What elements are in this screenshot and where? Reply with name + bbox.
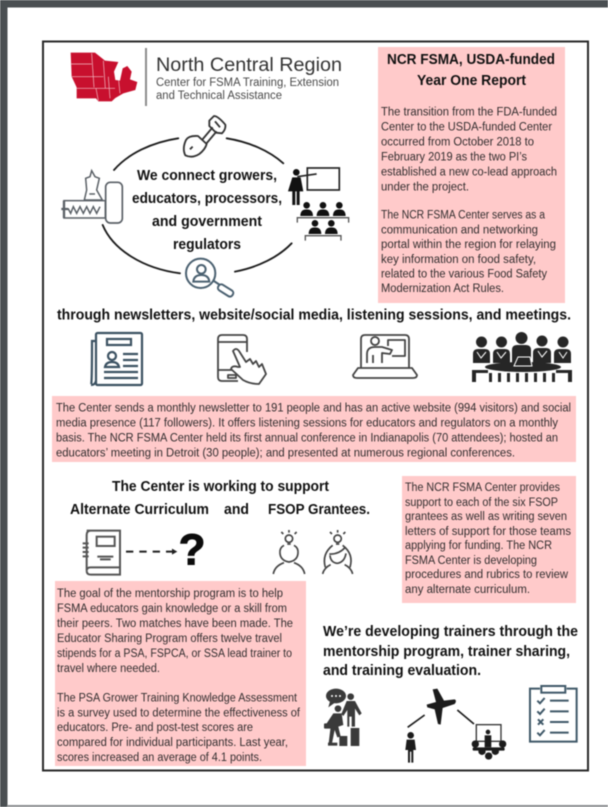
text: mentorship paragraph: travel where needed. <box>57 663 160 675</box>
icon: teacher and class <box>288 168 349 241</box>
panel: outreach summary: basis. The NCR FSMA Center held its first annual conference in Indianapolis (70 attendees); hosted an <box>56 432 558 444</box>
text: communication paragraph <box>381 210 556 295</box>
panel: report intro <box>378 47 565 303</box>
icon: trainer travel by plane <box>405 689 506 763</box>
panel: FSOP grantee support: procedures and rubrics to review <box>405 569 569 581</box>
text: communication paragraph: portal within the region for relaying <box>381 239 556 251</box>
panel: FSOP grantee support: letters of support for those teams <box>405 526 571 538</box>
text: mentorship paragraph: Educator Sharing Program offers twelve travel <box>57 633 282 645</box>
heading: the center is working to support: Alternate Curriculum <box>70 502 209 518</box>
text: assessment paragraph: educators. Pre- and post-test scores are <box>57 722 253 734</box>
icon: shovel <box>184 116 225 157</box>
heading: developing trainers <box>323 624 578 679</box>
panel: outreach summary: The Center sends a monthly newsletter to 191 people and has an active website (994 visitors) and social <box>56 402 571 414</box>
icon: newspaper <box>91 333 142 385</box>
text: transition paragraph: February 2019 as the two PI’s <box>381 152 527 164</box>
panel: FSOP grantee support: FSMA Center is developing <box>405 555 537 567</box>
text: communication paragraph: related to the various Food Safety <box>381 268 547 280</box>
panel: mentorship program <box>55 581 306 766</box>
panel: FSOP grantee support: grantees as well as writing seven <box>405 511 567 523</box>
heading: who we connect: We connect growers, <box>137 168 277 184</box>
logo: North Central Region: and Technical Assistance <box>156 90 282 102</box>
text: assessment paragraph: compared for individual participants. Last year, <box>57 737 288 749</box>
heading: the center is working to support <box>70 479 370 518</box>
icon: region map <box>71 53 137 101</box>
heading: through newsletters: through newsletters, website/social media, listening sessions, and meetings. <box>57 308 571 324</box>
ring arcs <box>103 138 292 273</box>
text: mentorship paragraph: FSMA educators gain knowledge or a skill from <box>57 603 287 615</box>
icon: meeting around a table <box>472 332 572 382</box>
text: mentorship paragraph: stipends for a PSA, FSPCA, or SSA lead trainer to <box>57 648 292 660</box>
text: communication paragraph: Modernization Act Rules. <box>381 283 504 295</box>
text: communication paragraph: communication and networking <box>381 224 538 236</box>
text: transition paragraph: established a new co-lead approach <box>381 166 557 178</box>
text: assessment paragraph <box>57 692 301 764</box>
text: mentorship paragraph: their peers. Two matches have been made. The <box>57 618 293 630</box>
heading: the center is working to support: The Center is working to support <box>112 479 329 495</box>
text: mentorship paragraph: The goal of the mentorship program is to help <box>57 588 283 600</box>
icon: laptop with presenter <box>353 335 417 378</box>
heading: developing trainers: We’re developing trainers through the <box>323 624 578 640</box>
panel: FSOP grantee support: support to each of the six FSOP <box>405 497 558 509</box>
logo: North Central Region: Center for FSMA Training, Extension <box>156 77 339 89</box>
logo: North Central Region <box>71 48 342 106</box>
text: transition paragraph: Center to the USDA-funded Center <box>381 122 552 134</box>
panel: FSOP grantee support: any alternate curriculum. <box>405 584 530 596</box>
airplane <box>427 689 456 725</box>
heading: report title <box>387 52 555 89</box>
heading: developing trainers: mentorship program, trainer sharing, <box>323 644 570 660</box>
heading: who we connect: and government <box>152 214 262 230</box>
text: assessment paragraph: is a survey used to determine the effectiveness of <box>57 708 301 720</box>
panel: FSOP grantee support <box>402 476 576 603</box>
diagram: stakeholder ring <box>61 116 349 298</box>
icon: mentor and mentee on steps <box>324 689 362 746</box>
panel: FSOP grantee support: applying for funding. The NCR <box>405 540 552 552</box>
icon: evaluation checklist <box>530 686 577 742</box>
text: communication paragraph: The NCR FSMA Center serves as a <box>381 210 546 222</box>
panel: outreach summary: educators’ meeting in Detroit (30 people); and presented at numerous regional conferences. <box>56 448 515 460</box>
icon: curriculum book to question mark <box>83 526 206 575</box>
heading: who we connect: regulators <box>173 237 241 253</box>
text: transition paragraph: occurred from October 2018 to <box>381 136 534 148</box>
panel: FSOP grantee support: The NCR FSMA Center provides <box>405 482 560 494</box>
icon: processing machine <box>61 171 122 223</box>
heading: report title: Year One Report <box>417 73 526 89</box>
icon: phone with tapping hand <box>218 335 266 384</box>
heading: who we connect <box>132 168 282 253</box>
text: transition paragraph: under the project. <box>381 182 469 194</box>
heading: developing trainers: and training evaluation. <box>323 663 481 679</box>
heading: report title: NCR FSMA, USDA-funded <box>387 52 555 68</box>
icon: magnifier with person <box>186 259 234 298</box>
text: mentorship paragraph <box>57 588 293 675</box>
icon: curriculum book to question mark: ? <box>179 526 206 575</box>
text: transition paragraph <box>381 106 557 194</box>
text: assessment paragraph: The PSA Grower Training Knowledge Assessment <box>57 692 298 704</box>
panel: outreach summary <box>52 396 576 462</box>
icon: grantees with lightbulbs <box>273 530 353 574</box>
panel: outreach summary: media presence (117 followers). It offers listening sessions for educators and regulators on a monthly <box>56 418 558 430</box>
text: transition paragraph: The transition from the FDA-funded <box>381 106 557 118</box>
logo: North Central Region: North Central Region <box>156 55 342 76</box>
heading: who we connect: educators, processors, <box>132 191 282 207</box>
text: communication paragraph: key information on food safety, <box>381 254 536 266</box>
text: assessment paragraph: scores increased an average of 4.1 points. <box>57 752 262 764</box>
heading: the center is working to support: FSOP Grantees. <box>268 502 370 518</box>
heading: the center is working to support: and <box>224 502 249 518</box>
